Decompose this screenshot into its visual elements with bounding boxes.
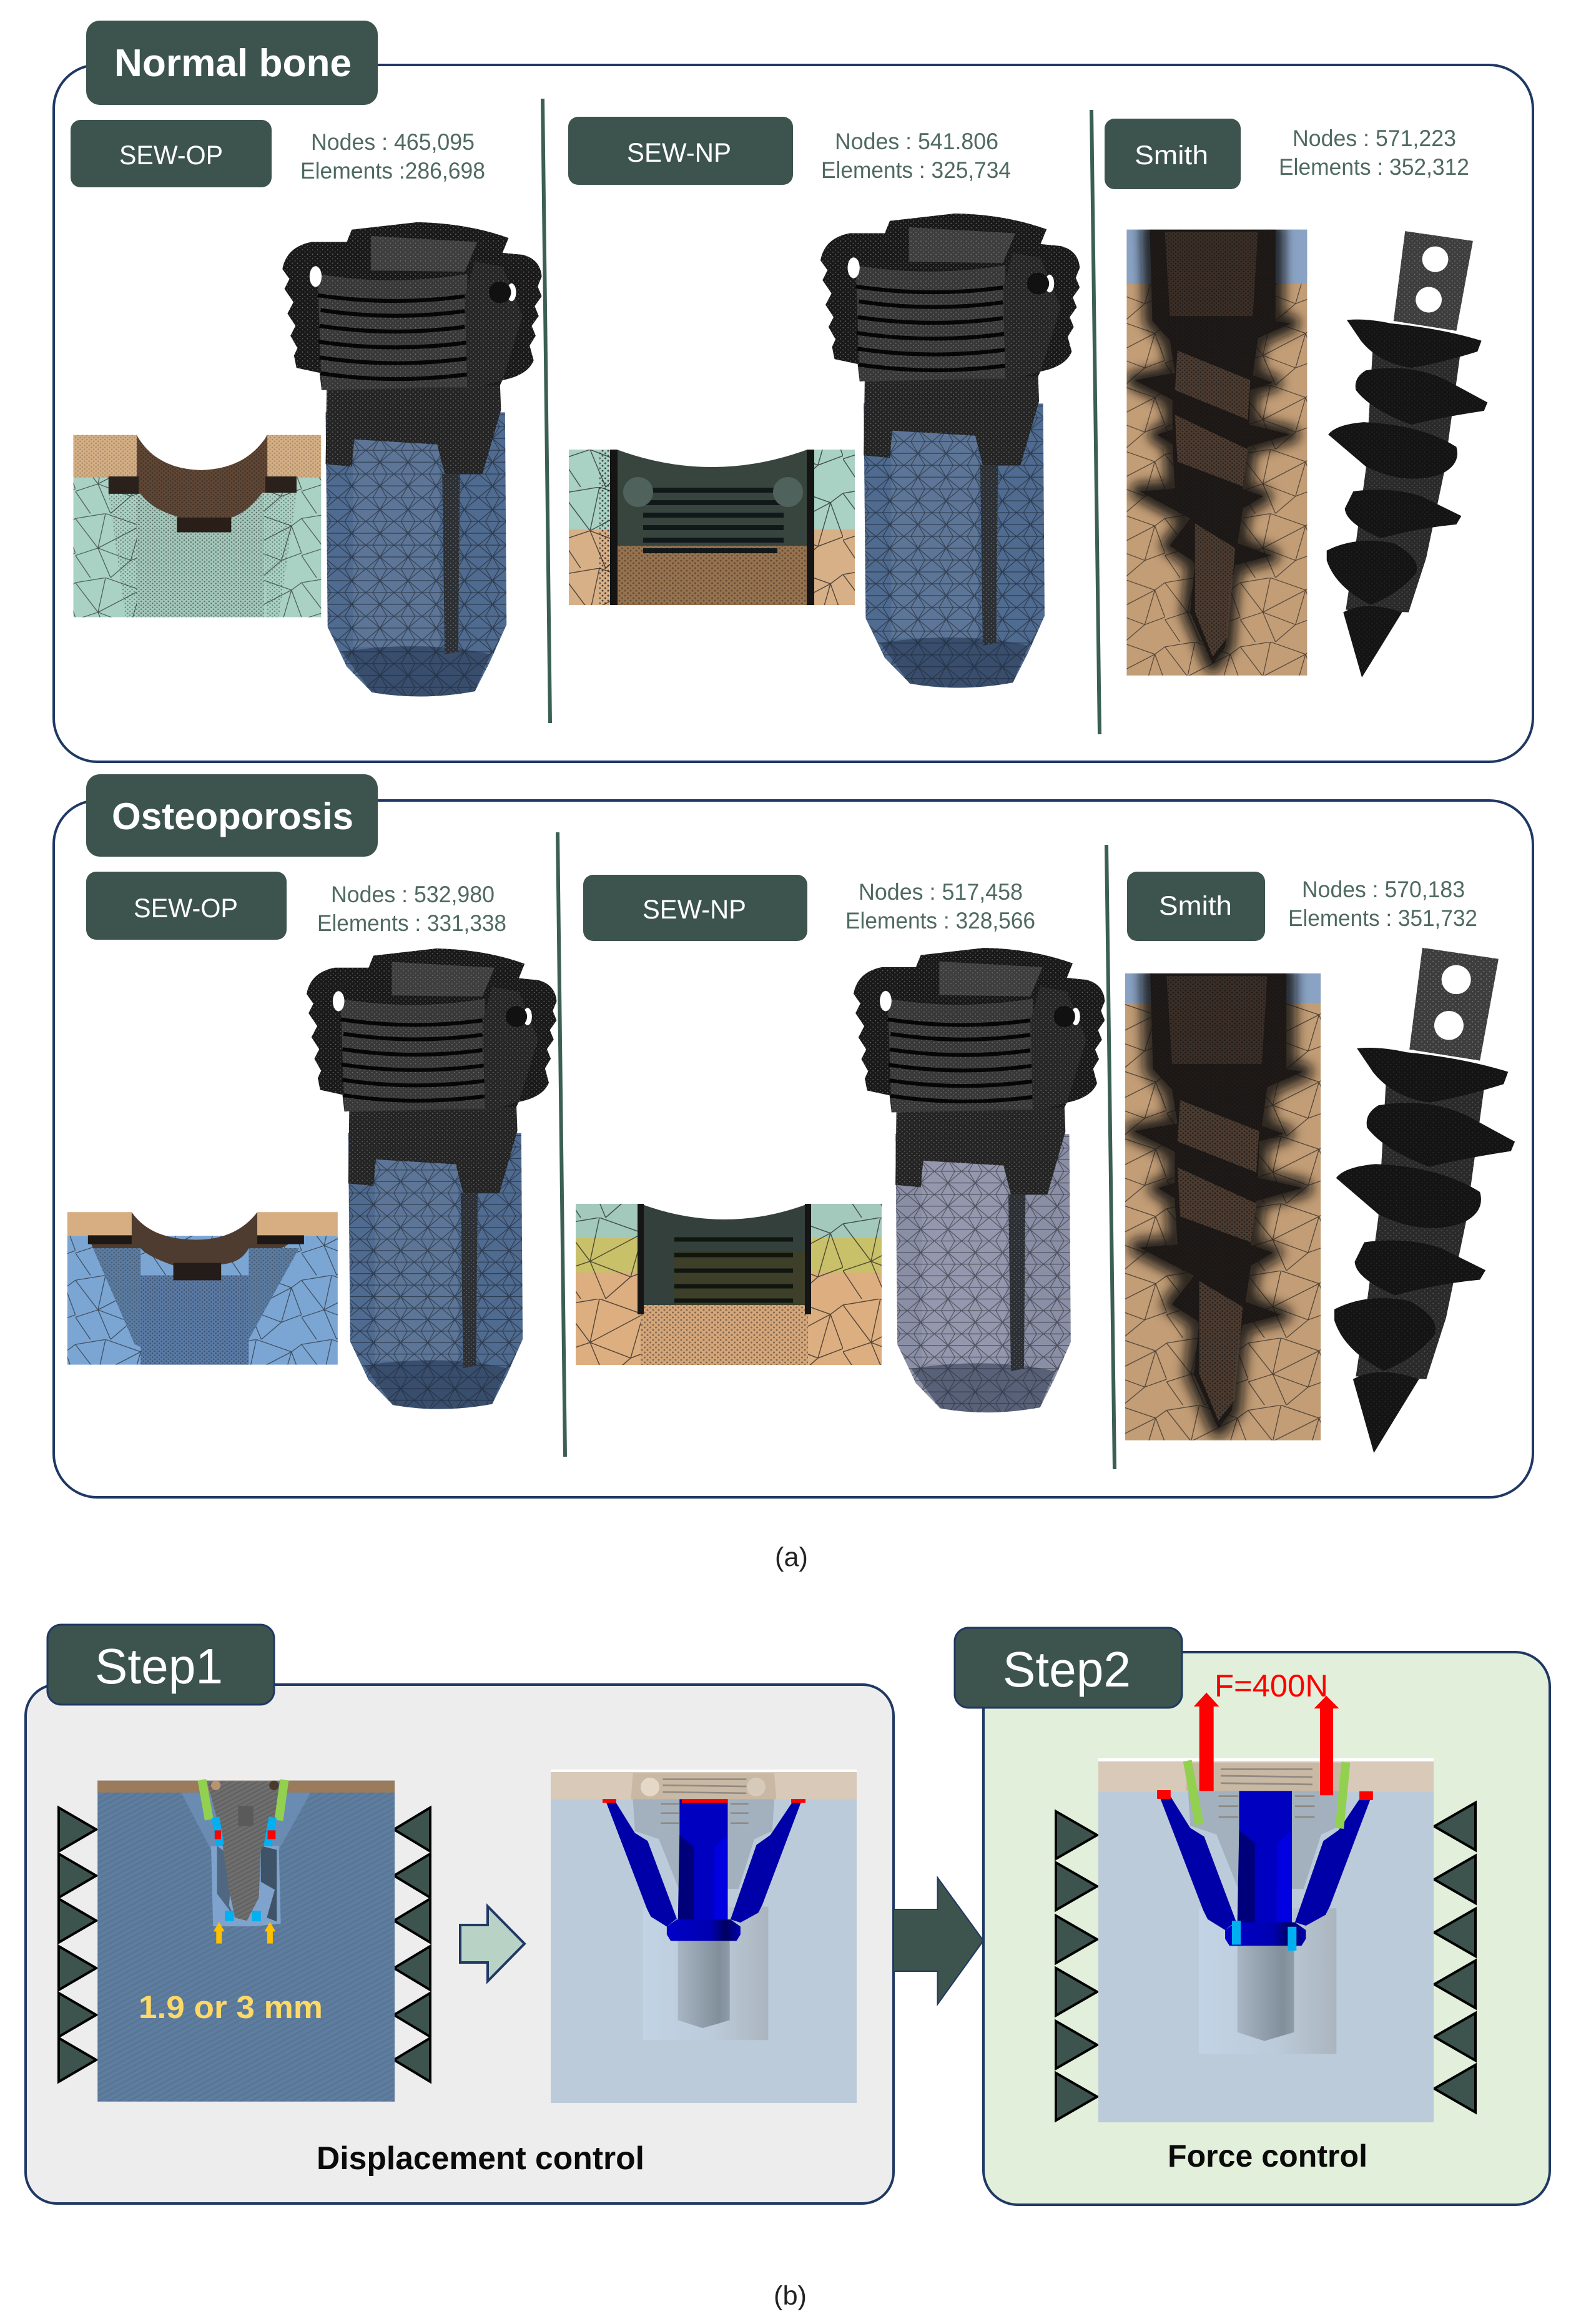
- red contact faces: [215, 1830, 275, 1839]
- panel frame: step 2: [983, 1652, 1550, 2205]
- mesh stats: SEW-NP normal bone: [821, 129, 1011, 183]
- mesh stats: SEW-NP osteoporosis: Elements : 328,566: [845, 908, 1035, 933]
- mesh stats: SEW-NP normal bone: Nodes : 541.806: [835, 129, 998, 154]
- mesh stats: SEW-OP osteoporosis: [317, 882, 506, 936]
- mesh stats: Smith osteoporosis: [1288, 877, 1477, 931]
- boundary supports: right: [1434, 1803, 1475, 2112]
- mesh section: SEW-OP osteoporosis: [67, 1212, 338, 1365]
- badge: SEW-NP normal bone: SEW-NP: [627, 138, 731, 168]
- mesh stats: Smith normal bone: Nodes : 571,223: [1293, 126, 1456, 151]
- arrow: step 1 transition: [460, 1906, 525, 1981]
- heading: Normal bone: [86, 21, 378, 105]
- red contact faces: [1157, 1790, 1373, 1800]
- mesh stats: Smith normal bone: [1279, 126, 1469, 180]
- boundary supports: right: [394, 1808, 430, 2082]
- caption: (a): (a): [775, 1542, 808, 1572]
- label: 1.9 or 3 mm: 1.9 or 3 mm: [139, 1989, 323, 2025]
- mesh stats: SEW-OP normal bone: [300, 129, 485, 184]
- panel: step 1 displacement control: [26, 1625, 894, 2203]
- badge: SEW-OP normal bone: [71, 120, 272, 187]
- badge: Smith normal bone: Smith: [1135, 140, 1208, 170]
- boundary supports: left: [59, 1808, 96, 2082]
- heading: Normal bone: Normal bone: [114, 42, 352, 85]
- divider: [558, 832, 565, 1457]
- caption: (b): (b): [774, 2281, 807, 2311]
- mesh section: SEW-OP normal bone: [74, 435, 321, 617]
- label: Displacement control: Displacement control: [317, 2140, 644, 2177]
- badge: Smith normal bone: [1105, 119, 1241, 189]
- mesh stats: SEW-NP normal bone: Elements : 325,734: [821, 157, 1011, 183]
- heading: Step2: Step2: [1003, 1642, 1131, 1697]
- mesh stats: SEW-NP osteoporosis: [845, 879, 1035, 933]
- mesh stats: Smith osteoporosis: Nodes : 570,183: [1302, 877, 1465, 902]
- badge: SEW-NP normal bone: [568, 117, 793, 185]
- boundary supports: left: [1056, 1811, 1097, 2120]
- mesh stats: SEW-OP osteoporosis: Elements : 331,338: [317, 910, 506, 936]
- implant mesh: SEW-OP osteoporosis: [307, 948, 556, 1409]
- label: F=400N: F=400N: [1214, 1668, 1328, 1703]
- divider: [1091, 110, 1100, 734]
- heading: Step1: Step1: [95, 1638, 223, 1694]
- panel: normal bone: [54, 21, 1533, 762]
- mesh stats: SEW-OP normal bone: Elements :286,698: [300, 158, 485, 184]
- mesh stats: SEW-NP osteoporosis: Nodes : 517,458: [859, 879, 1023, 905]
- arrow: step 1 to step 2: [894, 1878, 983, 2004]
- panel frame: osteoporosis: [54, 800, 1533, 1497]
- screw mesh: Smith normal bone: [1327, 231, 1487, 677]
- mesh section: SEW-NP normal bone: [569, 450, 855, 605]
- screw mesh: Smith osteoporosis: [1334, 948, 1515, 1453]
- panel: osteoporosis: [54, 774, 1533, 1497]
- cyan contact faces: [215, 1817, 273, 1846]
- mesh section: Smith normal bone: [1126, 230, 1307, 676]
- badge: SEW-OP osteoporosis: SEW-OP: [134, 894, 238, 923]
- divider: [1106, 845, 1115, 1469]
- badge: Smith osteoporosis: Smith: [1159, 891, 1232, 921]
- badge: SEW-OP normal bone: SEW-OP: [119, 140, 223, 170]
- displacement arrows: [214, 1922, 275, 1944]
- implant mesh: SEW-OP normal bone: [282, 222, 542, 696]
- badge: SEW-NP osteoporosis: SEW-NP: [643, 895, 746, 925]
- label: Force control: Force control: [1168, 2139, 1367, 2174]
- diagram: step 2 implant in bone: [1098, 1693, 1434, 2122]
- cyan contact faces: [1232, 1921, 1296, 1951]
- mesh stats: SEW-OP osteoporosis: Nodes : 532,980: [331, 882, 495, 907]
- mesh stats: SEW-OP normal bone: Nodes : 465,095: [311, 129, 475, 155]
- implant mesh: SEW-NP normal bone: [820, 214, 1080, 687]
- green spacers: [1188, 1761, 1346, 1828]
- heading: Step2: [955, 1628, 1182, 1708]
- heading: Osteoporosis: Osteoporosis: [112, 795, 353, 837]
- cyan base faces: [225, 1911, 261, 1921]
- mesh stats: Smith normal bone: Elements : 352,312: [1279, 154, 1469, 180]
- diagram: step 1 implant in bone: [551, 1770, 857, 2103]
- diagram: displacement model with sectioned implant: [97, 1780, 395, 2102]
- red contact faces: [603, 1799, 805, 1803]
- badge: SEW-NP osteoporosis: [583, 875, 807, 941]
- mesh stats: Smith osteoporosis: Elements : 351,732: [1288, 905, 1477, 931]
- green spacers: [202, 1780, 284, 1820]
- heading: Step1: [47, 1625, 274, 1705]
- heading: Osteoporosis: [86, 774, 378, 857]
- divider: [543, 99, 550, 723]
- badge: Smith osteoporosis: [1127, 872, 1265, 941]
- load arrows: [1194, 1693, 1339, 1795]
- implant mesh: SEW-NP osteoporosis: [854, 948, 1105, 1412]
- badge: SEW-OP osteoporosis: [86, 872, 287, 940]
- mesh section: Smith osteoporosis: [1125, 973, 1321, 1440]
- panel frame: normal bone: [54, 65, 1533, 762]
- panel frame: step 1: [26, 1685, 894, 2203]
- mesh section: SEW-NP osteoporosis: [576, 1204, 882, 1365]
- panel: step 2 force control: [955, 1628, 1550, 2205]
